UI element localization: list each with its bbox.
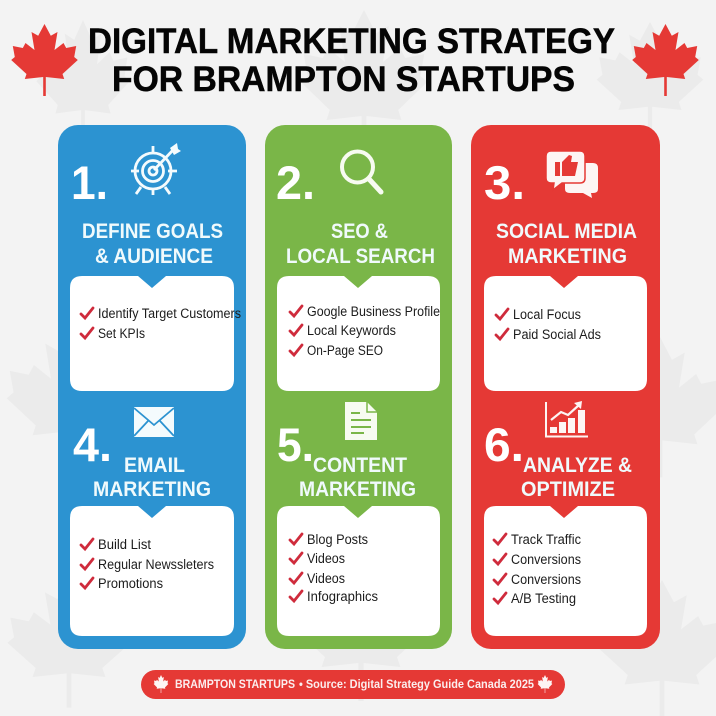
heading: seo and local search: SEO &	[331, 220, 388, 243]
heading: seo and local search	[286, 220, 435, 268]
icon: magnifying glass	[342, 152, 381, 192]
card: step 6 checklist: Conversions	[511, 552, 581, 567]
icon: chat bubbles with thumbs up	[546, 151, 598, 198]
card: step 2 checklist: Local Keywords	[307, 323, 396, 338]
card: step 4 checklist: Regular Newssleters	[98, 557, 214, 572]
heading: content marketing: CONTENT	[313, 454, 407, 477]
heading: social media marketing: MARKETING	[508, 245, 627, 268]
icon: target with arrow	[131, 143, 181, 195]
heading: analyze and optimize: ANALYZE &	[523, 454, 632, 477]
card: step 5 checklist: Videos	[307, 551, 345, 566]
icon: envelope	[134, 407, 174, 437]
heading: analyze and optimize	[521, 454, 632, 501]
card: step 3 checklist	[484, 276, 647, 391]
card: step 6 checklist: A/B Testing	[511, 591, 576, 606]
card: step 6 checklist: Conversions	[511, 572, 581, 587]
card: step 5 checklist: Blog Posts	[307, 532, 368, 547]
icon: footer leaf left	[154, 675, 168, 693]
footer text: BRAMPTON STARTUPS	[175, 677, 295, 691]
heading: email marketing	[93, 454, 211, 501]
icon: maple leaf right	[632, 24, 699, 96]
title: FOR BRAMPTON STARTUPS	[112, 60, 575, 99]
icon: document	[345, 402, 377, 440]
card: step 2 checklist: Google Business Profile	[307, 304, 440, 319]
card: step 2 checklist: On-Page SEO	[307, 343, 383, 358]
heading: define goals and audience: DEFINE GOALS	[82, 220, 223, 243]
card: step 4 checklist: Promotions	[98, 576, 163, 591]
footer text: • Source: Digital Strategy Guide Canada 2025	[299, 677, 534, 691]
card: step 1 checklist: Set KPIs	[98, 326, 145, 341]
card: step 5 checklist: Infographics	[307, 589, 378, 604]
heading: define goals and audience: & AUDIENCE	[95, 245, 213, 268]
heading: email marketing: MARKETING	[93, 478, 211, 501]
card: step 5 checklist: Videos	[307, 571, 345, 586]
icon: maple leaf left	[11, 24, 78, 96]
card: step 2 checklist	[277, 276, 440, 391]
step 3 number: 3.	[484, 156, 525, 209]
footer source pill	[141, 670, 565, 699]
heading: social media marketing	[496, 220, 637, 268]
footer text	[175, 677, 534, 691]
title: DIGITAL MARKETING STRATEGY	[88, 22, 615, 61]
card: step 6 checklist: Track Traffic	[511, 532, 581, 547]
heading: content marketing: MARKETING	[299, 478, 416, 501]
step 1 number: 1.	[71, 156, 108, 209]
step 6 number: 6.	[484, 418, 524, 471]
heading: define goals and audience	[82, 220, 223, 268]
card: step 3 checklist: Paid Social Ads	[513, 327, 601, 342]
card: step 4 checklist: Build List	[98, 537, 151, 552]
panel: green column	[265, 125, 452, 649]
heading: content marketing	[299, 454, 416, 501]
icon: bar chart with arrow	[546, 401, 588, 436]
icon: footer leaf right	[538, 675, 552, 693]
panel: blue column	[58, 125, 246, 649]
step 4 number: 4.	[73, 418, 112, 471]
title	[88, 22, 615, 99]
heading: analyze and optimize: OPTIMIZE	[521, 478, 615, 501]
card: step 5 checklist	[277, 506, 440, 636]
step 2 number: 2.	[276, 156, 315, 209]
step 5 number: 5.	[277, 418, 314, 471]
card: step 1 checklist: Identify Target Customers	[98, 306, 241, 321]
card: step 1 checklist	[70, 276, 241, 391]
card: step 6 checklist	[484, 506, 647, 636]
card: step 4 checklist	[70, 506, 234, 636]
panel: red column	[471, 125, 660, 649]
heading: social media marketing: SOCIAL MEDIA	[496, 220, 637, 243]
heading: seo and local search: LOCAL SEARCH	[286, 245, 435, 268]
heading: email marketing: EMAIL	[124, 454, 185, 477]
card: step 3 checklist: Local Focus	[513, 307, 581, 322]
